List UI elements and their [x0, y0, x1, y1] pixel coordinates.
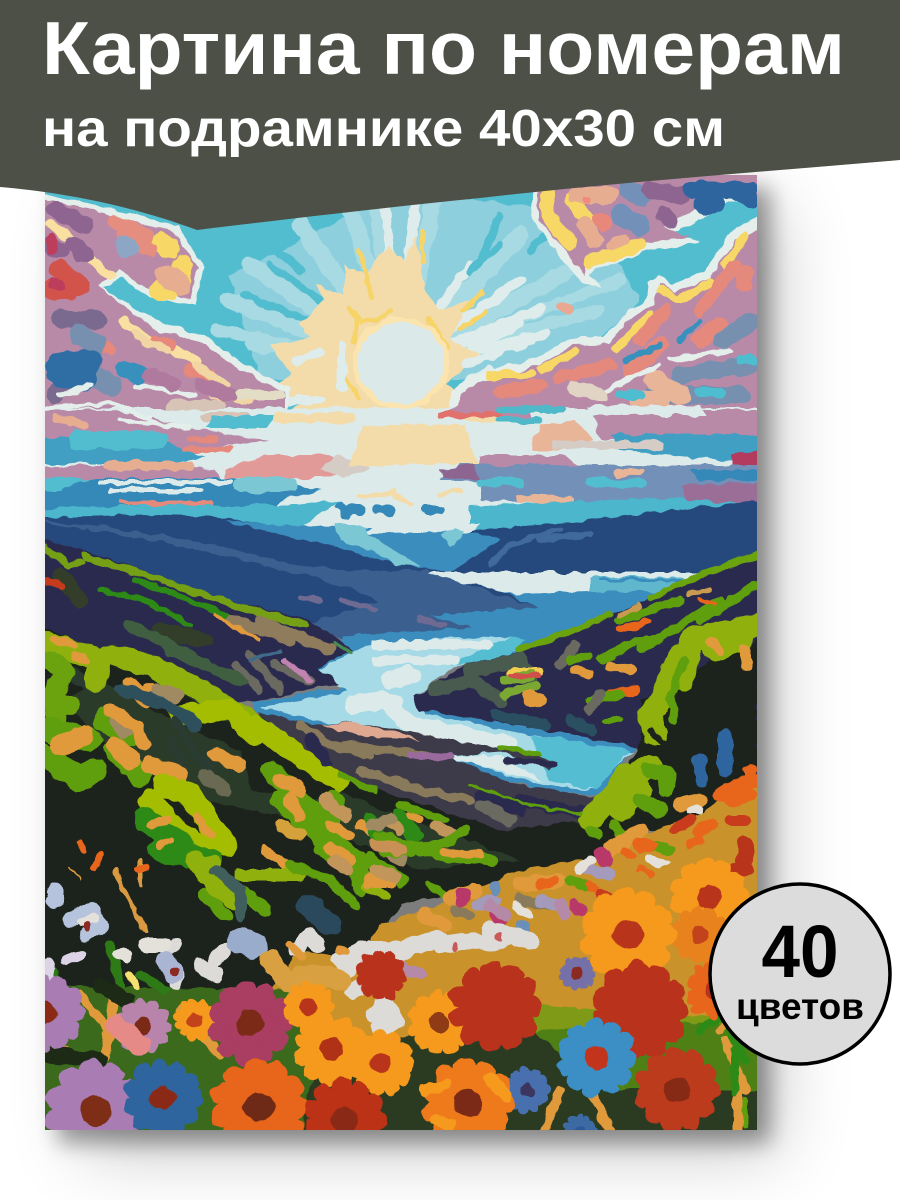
sun glow [270, 229, 535, 410]
flowers [15, 867, 739, 1152]
sky bands near horizon [30, 403, 770, 530]
lake [252, 570, 698, 796]
tree on right [590, 625, 757, 840]
white and lavender flowers [50, 892, 530, 1030]
subtitle: на подрамнике 40х30 см [42, 100, 725, 158]
painting: landscape canvas [15, 160, 770, 1152]
canvas shadow [58, 188, 780, 1155]
hill: green slopes left [30, 622, 650, 1000]
meadow patches [425, 780, 757, 930]
badge number: 40 [762, 910, 838, 993]
sun disc [355, 319, 447, 407]
cloud: right middle [449, 216, 757, 410]
island [258, 712, 610, 830]
hill: right shore [414, 550, 757, 774]
banner [0, 0, 900, 230]
mountains [30, 500, 770, 640]
badge: 40 colours [710, 884, 890, 1064]
flower meadow background [30, 765, 770, 1140]
title: Картина по номерам [42, 6, 845, 90]
sky [45, 192, 757, 410]
badge label: цветов [736, 986, 864, 1027]
hill: far left [30, 535, 354, 703]
cloud: top left [45, 194, 291, 410]
cloud: top right [530, 175, 757, 288]
